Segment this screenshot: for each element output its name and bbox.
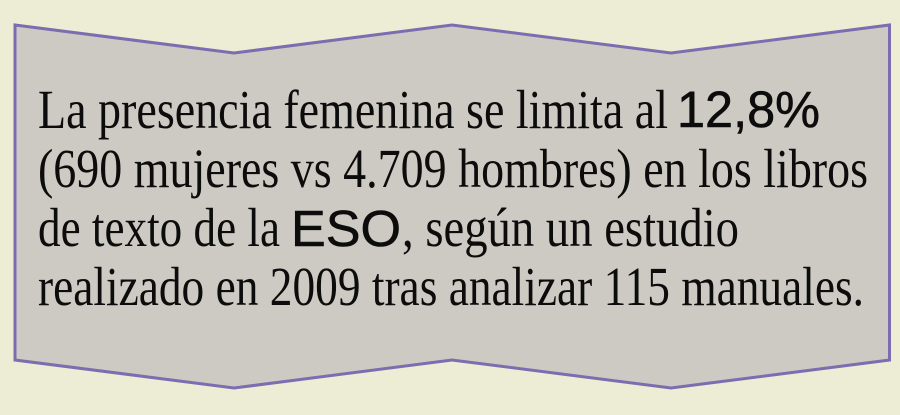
text line 3: de texto de la [38, 197, 280, 258]
text line 3 [38, 197, 739, 258]
text line 3: ESO [291, 200, 401, 257]
text line 3: , según un estudio [402, 197, 739, 258]
text block: statement [38, 79, 868, 317]
text line 1: La presencia femenina se limita al [38, 79, 668, 140]
text line 1: 12,8% [677, 81, 820, 138]
